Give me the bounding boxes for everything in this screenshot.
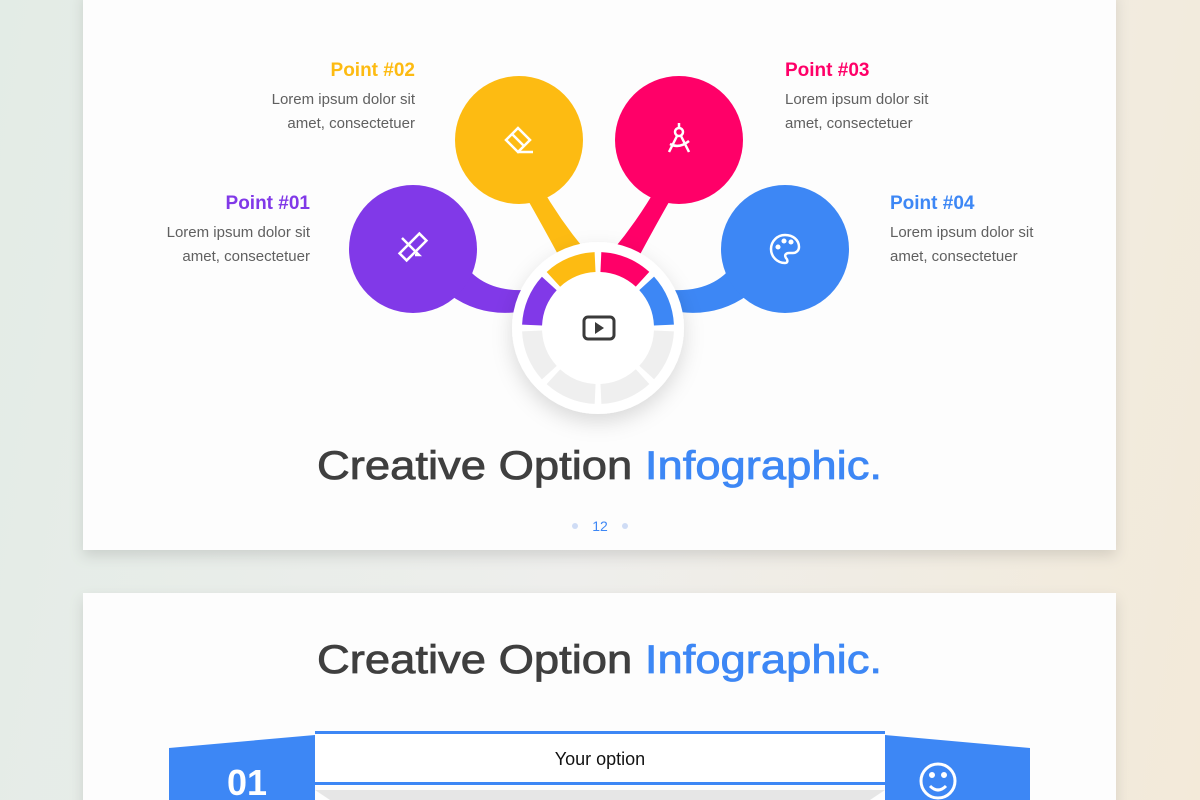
text: point 03 xyxy=(785,60,929,132)
text: point 03: amet, consectetuer xyxy=(785,115,913,132)
text: point 01 xyxy=(167,193,311,265)
page number: 12 xyxy=(592,518,608,534)
icon: play xyxy=(584,317,614,339)
text: point 04: Lorem ipsum dolor sit xyxy=(890,224,1034,241)
text: point 01: Lorem ipsum dolor sit xyxy=(167,224,311,241)
text: point 04: Point #04 xyxy=(890,193,975,214)
connector: pink xyxy=(613,185,673,262)
connector: blue xyxy=(668,258,748,313)
text: point 04 xyxy=(890,193,1034,265)
diagram: option bubbles xyxy=(349,76,849,421)
icon: smiley xyxy=(921,764,955,798)
text: point 02: Point #02 xyxy=(331,60,415,81)
title: bottom slide: Creative Option Infographic. xyxy=(317,638,882,682)
text: point 02: amet, consectetuer xyxy=(287,115,415,132)
box: your option: Your option xyxy=(555,749,645,769)
icon: compass xyxy=(669,123,689,152)
text: point 04: amet, consectetuer xyxy=(890,248,1018,265)
box: your option xyxy=(315,731,885,786)
icon: ruler pencil xyxy=(400,234,426,260)
icon: palette xyxy=(771,235,799,263)
text: point 02 xyxy=(272,60,416,132)
page number xyxy=(572,518,628,534)
card: bottom slide xyxy=(83,593,1116,800)
connector: yellow xyxy=(525,185,585,262)
connector: purple xyxy=(450,258,530,313)
banner left: 01 xyxy=(169,735,315,800)
text: point 01: amet, consectetuer xyxy=(182,248,310,265)
bubble: yellow xyxy=(455,76,583,204)
banner right: smiley xyxy=(885,735,1030,800)
text: point 02: Lorem ipsum dolor sit xyxy=(272,91,416,108)
icon: eraser xyxy=(506,128,533,152)
text: point 03: Lorem ipsum dolor sit xyxy=(785,91,929,108)
grey lower band xyxy=(315,790,885,800)
title: top slide: Creative Option Infographic. xyxy=(317,444,882,488)
hub: center ring xyxy=(505,235,691,421)
text: point 01: Point #01 xyxy=(226,193,310,214)
text: point 03: Point #03 xyxy=(785,60,869,81)
card: top slide xyxy=(83,0,1116,550)
bubble: purple xyxy=(349,185,477,313)
bubble: blue xyxy=(721,185,849,313)
bubble: pink xyxy=(615,76,743,204)
option strip xyxy=(169,731,1030,800)
